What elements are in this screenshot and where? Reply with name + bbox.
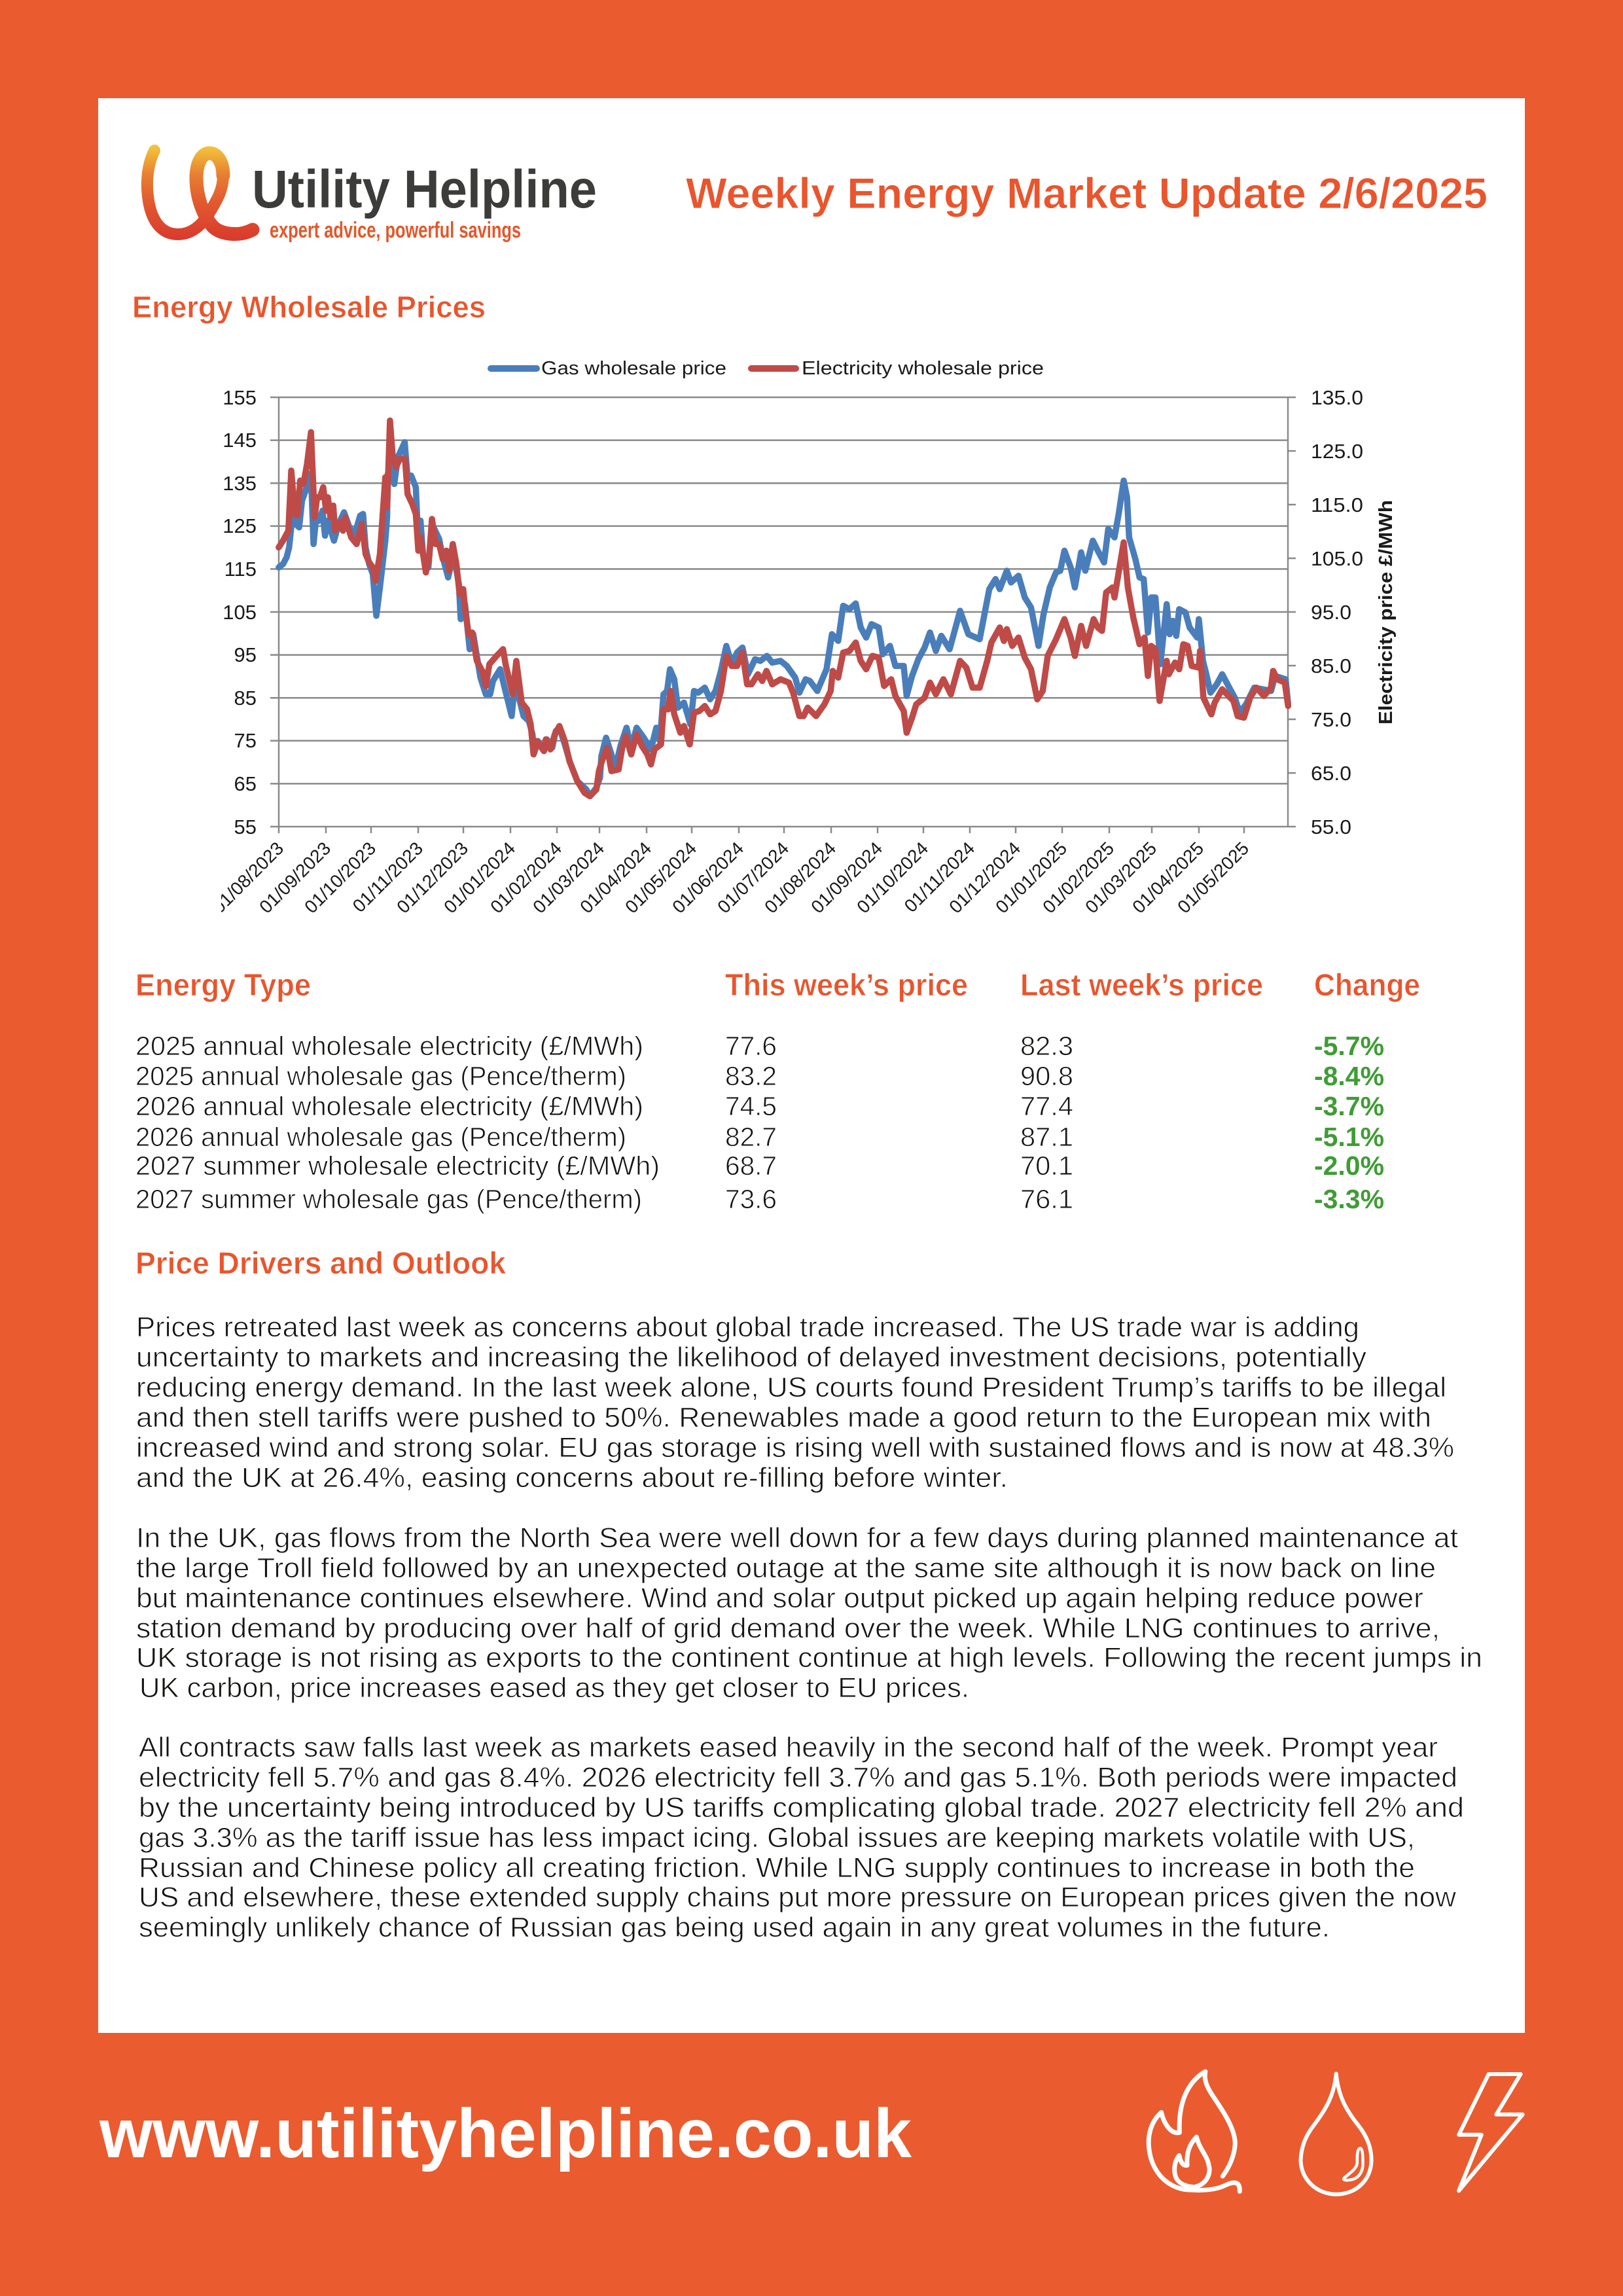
- table row: 2027 summer gas: 76.1: [1020, 1184, 1073, 1214]
- table row: 2025 electricity: [135, 1031, 1384, 1061]
- table header: Change: [1314, 967, 1420, 1002]
- left axis labels: 135: [223, 472, 257, 495]
- table row: 2026 electricity: 77.4: [1020, 1091, 1073, 1121]
- x axis date labels: 01/06/2024: [668, 838, 747, 917]
- left axis labels: 155: [223, 386, 257, 409]
- table row: 2026 electricity: -3.7%: [1314, 1091, 1384, 1121]
- chart legend: Electricity wholesale price: [802, 358, 1044, 379]
- table row: 2025 gas: 2025 annual wholesale gas (Pence/therm): [135, 1061, 626, 1091]
- text block: paragraph 3: All contracts saw falls last week as markets eased heavily in the second half of the week. Prompt year: [139, 1732, 1438, 1763]
- x axis date labels: 01/07/2024: [713, 838, 793, 917]
- left axis labels: [223, 386, 257, 838]
- icon: lightning bolt: [1459, 2074, 1523, 2191]
- x axis date labels: 01/09/2024: [807, 838, 886, 917]
- table row: 2026 gas: [135, 1122, 1384, 1152]
- table row: 2025 gas: 90.8: [1020, 1061, 1073, 1091]
- table row: 2026 gas: 82.7: [725, 1122, 777, 1152]
- table row: 2026 gas: 87.1: [1020, 1122, 1073, 1152]
- x axis date labels: 01/01/2024: [440, 838, 519, 917]
- x axis date labels: 01/08/2024: [760, 838, 840, 917]
- right axis labels: 125.0: [1311, 440, 1363, 463]
- line chart: gas and electricity wholesale prices: [208, 358, 1397, 917]
- table row: 2027 summer gas: 2027 summer wholesale gas (Pence/therm): [135, 1184, 642, 1214]
- text block: paragraph 2: [136, 1522, 1482, 1704]
- left axis labels: 145: [223, 429, 257, 452]
- table row: 2027 summer gas: 73.6: [725, 1184, 777, 1214]
- table row: 2026 electricity: [135, 1091, 1384, 1121]
- footer website URL: www.utilityhelpline.co.uk: [99, 2095, 912, 2172]
- table row: 2025 electricity: -5.7%: [1314, 1031, 1384, 1061]
- left axis labels: 55: [234, 816, 257, 838]
- text block: paragraph 1: and then stell tariffs were pushed to 50%. Renewables made a good return to the European mix with: [136, 1402, 1431, 1433]
- text block: paragraph 2: the large Troll field followed by an unexpected outage at the same site although it is now back on line: [136, 1552, 1436, 1584]
- x axis date labels: 01/11/2024: [901, 838, 978, 916]
- icon: water drop: [1301, 2073, 1372, 2195]
- text block: paragraph 2: UK carbon, price increases eased as they get closer to EU prices.: [139, 1672, 969, 1704]
- left axis labels: 75: [234, 729, 257, 752]
- table row: 2025 gas: [135, 1061, 1384, 1091]
- right axis labels: 75.0: [1311, 708, 1351, 731]
- left axis labels: 125: [223, 514, 257, 537]
- text block: paragraph 1: [136, 1312, 1454, 1494]
- table row: 2025 electricity: 77.6: [725, 1031, 777, 1061]
- table row: 2027 summer electricity: -2.0%: [1314, 1151, 1384, 1181]
- right axis labels: [1311, 386, 1363, 838]
- x axis date labels: [221, 842, 1248, 912]
- text block: paragraph 3: seemingly unlikely chance of Russian gas being used again in any great volumes in the future.: [139, 1912, 1330, 1943]
- title: Weekly Energy Market Update 2/6/2025: [686, 169, 1488, 217]
- text block: paragraph 1: uncertainty to markets and increasing the likelihood of delayed investment decisions, potentially: [136, 1342, 1367, 1373]
- text block: paragraph 3: electricity fell 5.7% and gas 8.4%. 2026 electricity fell 3.7% and gas 5.1%. Both periods were impacted: [139, 1762, 1457, 1793]
- table row: 2027 summer electricity: 70.1: [1020, 1151, 1073, 1181]
- logo tagline: expert advice, powerful savings: [270, 218, 521, 243]
- table header: Energy Type: [135, 967, 311, 1002]
- text block: paragraph 1: Prices retreated last week as concerns about global trade increased. The US trade war is adding: [136, 1312, 1359, 1343]
- right axis labels: 55.0: [1311, 816, 1351, 838]
- x axis date labels: 01/04/2024: [576, 838, 655, 917]
- x axis date labels: 01/05/2024: [621, 838, 700, 917]
- text block: paragraph 1: and the UK at 26.4%, easing concerns about re-filling before winter.: [136, 1462, 1008, 1494]
- table row: 2027 summer gas: -3.3%: [1314, 1184, 1384, 1214]
- x axis date labels: 01/03/2025: [1081, 838, 1160, 917]
- x axis date labels: 01/10/2024: [853, 838, 932, 917]
- text block: paragraph 2: In the UK, gas flows from the North Sea were well down for a few days during planned maintenance at: [136, 1522, 1458, 1554]
- left axis labels: 85: [234, 687, 257, 709]
- chart legend: [491, 358, 1044, 379]
- table row: 2025 electricity: 82.3: [1020, 1031, 1073, 1061]
- text block: paragraph 3: [139, 1732, 1464, 1943]
- x axis date labels: 01/12/2024: [945, 838, 1024, 917]
- right axis title: Electricity price £/MWh: [1376, 500, 1397, 725]
- x axis date labels: 01/12/2023: [393, 838, 472, 917]
- table row: 2026 electricity: 74.5: [725, 1091, 777, 1121]
- table row: 2027 summer electricity: 68.7: [725, 1151, 777, 1181]
- text block: paragraph 2: station demand by producing over half of grid demand over the week. While LNG continues to arrive,: [136, 1613, 1440, 1644]
- right axis labels: 105.0: [1311, 547, 1363, 570]
- x axis date labels: 01/02/2024: [486, 838, 565, 917]
- text block: paragraph 3: by the uncertainty being introduced by US tariffs complicating global trade. 2027 electricity fell 2% and: [139, 1792, 1464, 1823]
- white content panel: [98, 98, 1525, 2033]
- text block: paragraph 3: Russian and Chinese policy all creating friction. While LNG supply continues to increase in both the: [139, 1852, 1415, 1884]
- left axis labels: 65: [234, 772, 257, 795]
- right axis labels: 85.0: [1311, 655, 1351, 677]
- text block: paragraph 3: gas 3.3% as the tariff issue has less impact icing. Global issues are keeping markets volatile with US,: [139, 1822, 1415, 1854]
- x axis date labels: 01/01/2025: [991, 838, 1071, 917]
- icon: logo swirl: [147, 151, 253, 234]
- x axis date labels: 01/05/2025: [1173, 838, 1253, 917]
- table row: 2026 electricity: 2026 annual wholesale electricity (£/MWh): [135, 1091, 643, 1121]
- heading: Price Drivers and Outlook: Price Drivers and Outlook: [135, 1246, 507, 1280]
- table header: [135, 967, 1420, 1002]
- table header: This week’s price: [725, 967, 968, 1002]
- left axis labels: 115: [224, 558, 257, 581]
- text block: paragraph 3: US and elsewhere, these extended supply chains put more pressure on European prices given the now: [139, 1882, 1457, 1913]
- table row: 2027 summer electricity: [135, 1151, 1384, 1181]
- x axis date labels: 01/04/2025: [1128, 838, 1207, 917]
- series: gas wholesale price: [279, 442, 1288, 796]
- x axis date labels: 01/10/2023: [300, 838, 380, 917]
- table row: 2025 gas: -8.4%: [1314, 1061, 1384, 1091]
- right axis labels: 115.0: [1311, 493, 1363, 516]
- x axis date labels: 01/08/2023: [208, 838, 287, 917]
- table row: 2027 summer electricity: 2027 summer wholesale electricity (£/MWh): [135, 1151, 660, 1181]
- table: energy prices: [135, 967, 1420, 1214]
- x axis date labels: 01/03/2024: [529, 838, 608, 917]
- logo: Utility Helpline: [147, 151, 597, 243]
- left axis labels: 105: [223, 601, 257, 624]
- right axis labels: 135.0: [1311, 386, 1363, 409]
- x axis date labels: 01/02/2025: [1039, 838, 1118, 917]
- text block: paragraph 2: but maintenance continues elsewhere. Wind and solar output picked up again helping reduce power: [136, 1583, 1423, 1614]
- logo wordmark: Utility Helpline: [252, 160, 597, 219]
- right axis labels: 65.0: [1311, 762, 1351, 785]
- text block: paragraph 2: UK storage is not rising as exports to the continent continue at high levels. Following the recent jumps in: [136, 1642, 1482, 1674]
- x axis date labels: 01/09/2023: [255, 838, 334, 917]
- chart legend: Gas wholesale price: [541, 358, 726, 379]
- heading: Energy Wholesale Prices: Energy Wholesale Prices: [132, 290, 486, 324]
- x axis date labels: 01/11/2023: [349, 838, 427, 916]
- icon: flame: [1149, 2072, 1240, 2191]
- table row: 2027 summer gas: [135, 1184, 1384, 1214]
- table header: Last week’s price: [1020, 967, 1263, 1002]
- right axis labels: 95.0: [1311, 601, 1351, 624]
- text block: paragraph 1: increased wind and strong solar. EU gas storage is rising well with sustained flows and is now at 48.3%: [136, 1432, 1454, 1463]
- text block: paragraph 1: reducing energy demand. In the last week alone, US courts found President Trump’s tariffs to be illegal: [136, 1372, 1446, 1403]
- table row: 2025 gas: 83.2: [725, 1061, 777, 1091]
- series: electricity wholesale price: [279, 420, 1288, 796]
- table row: 2025 electricity: 2025 annual wholesale electricity (£/MWh): [135, 1031, 643, 1061]
- table row: 2026 gas: -5.1%: [1314, 1122, 1384, 1152]
- table row: 2026 gas: 2026 annual wholesale gas (Pence/therm): [135, 1122, 626, 1152]
- left axis labels: 95: [234, 643, 257, 666]
